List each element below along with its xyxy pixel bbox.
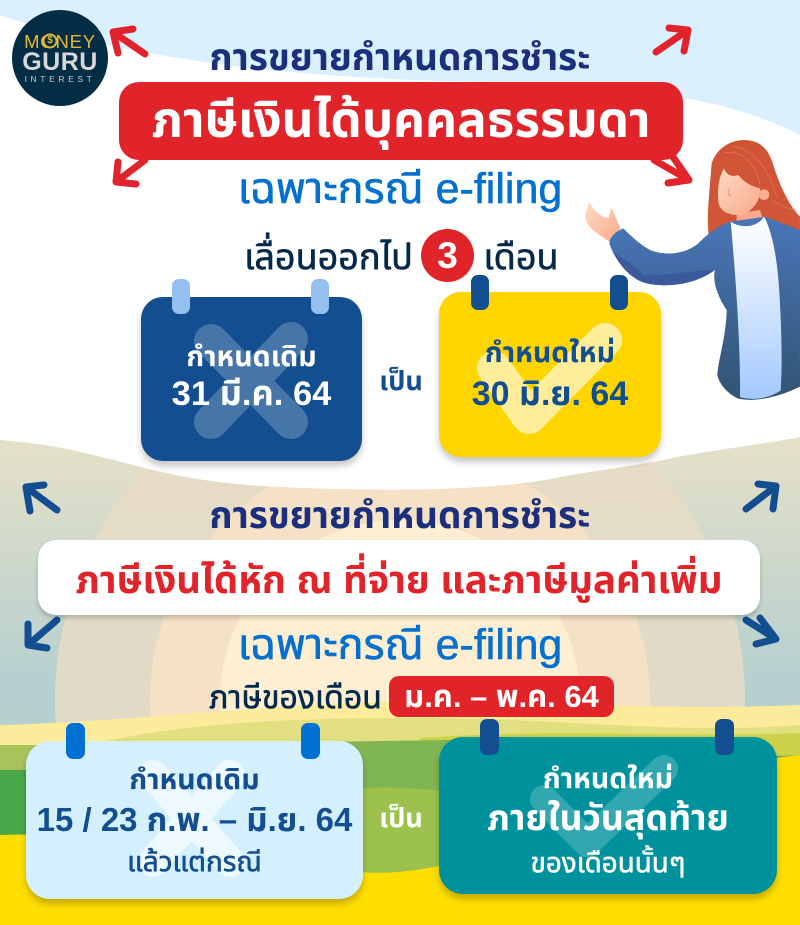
banner: withholding and VAT (38, 540, 760, 615)
icon: x mark (194, 322, 308, 439)
new date text: กำหนดใหม่ (485, 337, 615, 369)
icon: check mark (477, 323, 622, 434)
old date text: กำหนดเดิม (129, 764, 260, 796)
calendar: new deadline last day: ของเดือนนั้นๆ (531, 847, 685, 878)
old date text: กำหนดเดิม (186, 341, 317, 373)
postponed 3 months: เดือน (483, 236, 559, 277)
banner: personal income tax (119, 82, 683, 160)
postponed 3 months (244, 229, 559, 282)
heading 1: การขยายกำหนดการชำระ (210, 37, 590, 78)
postponed 3 months: เลื่อนออกไป (244, 236, 413, 277)
icon: check mark (530, 755, 678, 857)
connector text: เป็น (379, 803, 423, 833)
sub heading e-filing 2: เฉพาะกรณี e-filing (238, 621, 562, 669)
banner: withholding and VAT: ภาษีเงินได้หัก ณ ที่จ่าย และภาษีมูลค่าเพิ่ม (76, 559, 722, 602)
icon: logo: GURU (22, 48, 98, 76)
calendar: new deadline last day (439, 737, 777, 894)
calendar: new deadline 30 Jun (439, 292, 661, 457)
icon: logo: MONEY (24, 31, 96, 52)
calendar: old deadline 15/23: 15 / 23 ก.พ. – มิ.ย. 64 (37, 801, 352, 838)
tax months: ม.ค. – พ.ค. 64 (404, 679, 599, 714)
new date text: กำหนดใหม่ (543, 763, 673, 795)
heading 2: การขยายกำหนดการชำระ (210, 495, 590, 536)
calendar: new deadline last day: ภายในวันสุดท้าย (487, 798, 729, 838)
tax months: ภาษีของเดือน (209, 679, 382, 715)
calendar: old deadline 15/23: แล้วแต่กรณี (127, 846, 262, 877)
calendar: new deadline 30 Jun: 30 มิ.ย. 64 (472, 375, 628, 413)
tax months (209, 676, 614, 717)
sub heading e-filing 1: เฉพาะกรณี e-filing (238, 165, 562, 213)
banner: personal income tax: ภาษีเงินได้บุคคลธรรมดา (151, 93, 651, 148)
calendar: old deadline 31 Mar: 31 มี.ค. 64 (172, 375, 331, 413)
icon: logo (12, 10, 108, 106)
icon: x mark (138, 760, 245, 877)
icon: logo: $ (47, 35, 53, 46)
postponed 3 months: 3 (437, 235, 458, 276)
calendar: old deadline 31 Mar (141, 297, 362, 461)
connector text: เป็น (379, 366, 423, 396)
calendar: old deadline 15/23 (26, 741, 363, 899)
icon: logo: INTEREST (25, 74, 95, 84)
